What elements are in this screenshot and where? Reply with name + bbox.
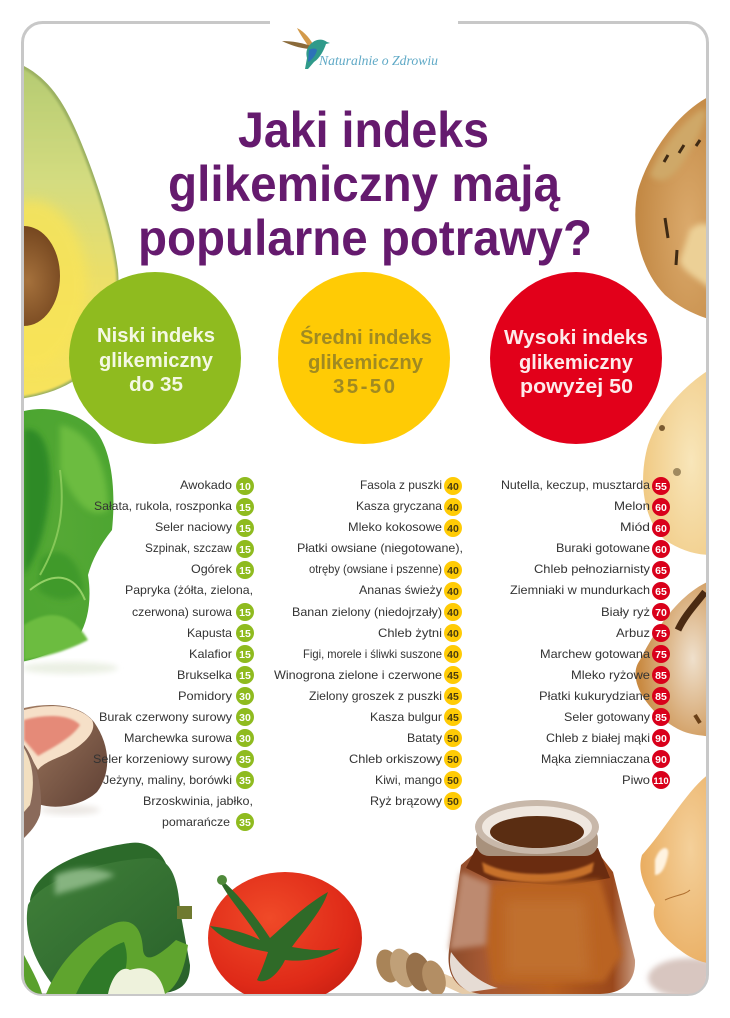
row: Winogrona: 45 [447,670,459,682]
title: popularne potrawy? [138,210,592,266]
title: Jaki indeks [238,102,489,158]
row: Seler gotowany: 85 [655,712,667,724]
row: Chleb pełnoziarnisty: 65 [655,565,667,577]
circle: high glycemic index: glikemiczny [519,351,634,374]
row: Mąka ziemniaczana [541,750,670,768]
row: Ananas: 40 [447,586,459,598]
row: Brzoskwinia: pomarańcze [162,815,230,829]
logo text: Naturalnie o Zdrowiu [318,54,438,69]
circle: low glycemic index [69,272,241,444]
row: Szpinak: Szpinak, szczaw [145,541,232,555]
row: Kasza gryczana: 40 [447,502,459,514]
row: Seler naciowy [155,519,254,537]
row: Kiwi: Kiwi, mango [375,773,442,787]
photo: fig [24,705,107,838]
circle: high glycemic index [490,272,662,444]
row: Kasza gryczana: Kasza gryczana [356,499,442,513]
row: Bataty: Bataty [407,731,442,745]
row: Papryka: czerwona) surowa [132,605,232,619]
row: Seler gotowany: Seler gotowany [564,710,650,724]
photo: lettuce [20,409,118,674]
row: Melon [614,498,670,516]
row: Szpinak: 15 [239,544,251,556]
row: Zielony groszek: Zielony groszek z puszki [309,689,442,703]
row: Płatki owsiane: 40 [447,565,459,577]
row: Kalafior [189,645,254,663]
row: Mleko ryżowe: 85 [655,670,667,682]
row: Biały ryż: Biały ryż [601,605,650,619]
row: Ogórek: Ogórek [191,562,233,576]
row: Piwo: Piwo [622,773,650,787]
row: Kalafior: 15 [239,649,251,661]
row: Kapusta: 15 [239,628,251,640]
row: Fasola [360,477,462,495]
row: Sałata: Sałata, rukola, roszponka [94,499,232,513]
row: Kasza bulgur: Kasza bulgur [370,710,442,724]
row: Seler korzeniowy: Seler korzeniowy surowy [93,752,232,766]
circle: medium glycemic index: Średni indeks [300,325,432,349]
title: glikemiczny mają [168,156,561,212]
row: Ogórek [191,561,254,579]
row: Kapusta [187,624,254,642]
row: Miód [620,519,670,537]
photo: rustic bread [636,580,712,737]
row: Melon: Melon [614,499,650,513]
row: Buraki: Buraki gotowane [556,541,650,555]
row: Chleb żytni: Chleb żytni [378,626,442,640]
photo: honey dipper [376,948,476,994]
row: Kalafior: Kalafior [189,647,232,661]
row: Arbuz: 75 [655,628,667,640]
row: Papryka: Papryka (żółta, zielona, [125,583,253,597]
row: Melon: 60 [655,502,667,514]
photo: avocado [24,66,118,398]
photo: light bread [643,372,706,555]
list: high index foods [501,477,670,789]
row: Chleb żytni [378,624,462,642]
row: Brukselka: Brukselka [177,668,232,682]
row: Mleko kokosowe [348,519,462,537]
row: Kasza bulgur [370,708,462,726]
row: Ryż brązowy: Ryż brązowy [370,794,442,808]
icon: hummingbird [282,28,330,69]
row: Jeżyny [103,771,254,789]
circle: high glycemic index: Wysoki indeks [504,326,648,349]
row: Ananas [359,582,462,600]
row: Nutella [501,477,670,495]
row: Marchew: Marchew gotowana [540,647,650,661]
row: Chleb orkiszowy: 50 [447,754,459,766]
row: Ziemniaki [510,582,670,600]
row: Awokado [180,477,254,495]
row: Marchew: 75 [655,649,667,661]
circle: low glycemic index: Niski indeks [97,324,215,347]
row: Chleb z białej mąki [546,729,670,747]
row: Figi: Figi, morele i śliwki suszone [303,647,442,661]
row: Buraki [556,540,670,558]
photo: seeded bread [635,95,712,320]
row: Chleb pełnoziarnisty [534,561,670,579]
row: Pomidory [178,687,254,705]
row: Burak [99,708,254,726]
row: Sałata: 15 [239,502,251,514]
row: Seler naciowy: Seler naciowy [155,520,232,534]
row: Piwo [622,771,670,789]
row: Winogrona: Winogrona zielone i czerwone [274,668,442,682]
row: Brzoskwinia: Brzoskwinia, jabłko, [143,794,253,808]
row: Fasola: Fasola z puszki [360,478,442,492]
row: Mleko kokosowe: Mleko kokosowe [348,520,442,534]
row: Zielony groszek: 45 [447,691,459,703]
row: Marchew [540,645,670,663]
photo: green peppers [24,843,192,994]
row: Marchewka: 30 [239,733,251,745]
row: Kasza bulgur: 45 [447,712,459,724]
row: Kasza gryczana [356,498,462,516]
row: Ziemniaki: 65 [655,586,667,598]
row: Miód: Miód [620,520,650,534]
row: Nutella: Nutella, keczup, musztarda [501,478,650,492]
row: Chleb orkiszowy: Chleb orkiszowy [349,752,442,766]
row: Nutella: 55 [655,481,667,493]
row: Płatki owsiane: Płatki owsiane (niegotowane), [297,541,463,555]
row: Banan [292,603,462,621]
row: Płatki kukurydziane: 85 [655,691,667,703]
row: Seler korzeniowy: 35 [239,754,251,766]
title [138,102,592,266]
row: Seler gotowany [564,708,670,726]
row: Piwo: 110 [653,776,669,787]
row: Burak: Burak czerwony surowy [99,710,232,724]
row: Kiwi: 50 [447,775,459,787]
photo: crusty bread [640,776,706,994]
row: Awokado: 10 [239,481,251,493]
row: Papryka: 15 [239,607,251,619]
photo: tomato [208,872,362,1004]
row: Szpinak [145,540,254,558]
circle: medium glycemic index [278,272,450,444]
row: Arbuz: Arbuz [616,626,650,640]
row: Chleb pełnoziarnisty: Chleb pełnoziarnisty [534,562,650,576]
row: Chleb orkiszowy [349,750,462,768]
row: Brzoskwinia: 35 [239,817,251,829]
row: Mleko ryżowe [571,666,670,684]
row: Seler naciowy: 15 [239,523,251,535]
circle: medium glycemic index: glikemiczny [308,351,424,374]
row: Biały ryż [601,603,670,621]
row: Banan: Banan zielony (niedojrzały) [292,605,442,619]
row: Marchewka: Marchewka surowa [124,731,232,745]
row: Mąka ziemniaczana: Mąka ziemniaczana [541,752,650,766]
row: Bataty [407,729,462,747]
list: low index foods [93,477,254,831]
row: Ziemniaki: Ziemniaki w mundurkach [510,583,650,597]
circle: high glycemic index: powyżej 50 [520,375,633,398]
row: Ananas: Ananas świeży [359,583,442,597]
row: Papryka [125,583,254,621]
row: Arbuz [616,624,670,642]
circle: low glycemic index: glikemiczny [99,349,214,372]
row: Ryż brązowy: 50 [447,796,459,808]
row: Płatki kukurydziane: Płatki kukurydziane [539,689,650,703]
row: Jeżyny: Jeżyny, maliny, borówki [103,773,232,787]
row: Chleb z białej mąki: Chleb z białej mąki [546,731,650,745]
row: Kiwi [375,771,462,789]
row: Bataty: 50 [447,733,459,745]
row: Brukselka [177,666,254,684]
row: Ryż brązowy [370,792,462,810]
row: Zielony groszek [309,687,462,705]
row: Płatki kukurydziane [539,687,670,705]
circle: medium glycemic index: 35-50 [333,375,395,398]
logo: Naturalnie o Zdrowiu [282,28,438,69]
row: Chleb żytni: 40 [447,628,459,640]
row: Pomidory: Pomidory [178,689,232,703]
row: Buraki: 60 [655,544,667,556]
row: Kapusta: Kapusta [187,626,232,640]
row: Płatki owsiane [297,541,463,579]
row: Mleko kokosowe: 40 [447,523,459,535]
row: Chleb z białej mąki: 90 [655,733,667,745]
row: Brzoskwinia [143,794,254,831]
list: medium index foods [274,477,463,810]
row: Miód: 60 [655,523,667,535]
row: Brukselka: 15 [239,670,251,682]
row: Seler korzeniowy [93,750,254,768]
row: Sałata [94,498,254,516]
circle: low glycemic index: do 35 [129,373,183,396]
row: Awokado: Awokado [180,478,232,492]
row: Pomidory: 30 [239,691,251,703]
row: Mąka ziemniaczana: 90 [655,754,667,766]
row: Jeżyny: 35 [239,775,251,787]
row: Burak: 30 [239,712,251,724]
row: Mleko ryżowe: Mleko ryżowe [571,668,650,682]
photo: honey jar [448,800,635,994]
row: Figi: 40 [447,649,459,661]
row: Biały ryż: 70 [655,607,667,619]
row: Płatki owsiane: otręby (owsiane i pszenne) [309,562,442,576]
row: Fasola: 40 [447,481,459,493]
row: Winogrona [274,666,462,684]
row: Ogórek: 15 [239,565,251,577]
row: Banan: 40 [447,607,459,619]
row: Marchewka [124,729,254,747]
